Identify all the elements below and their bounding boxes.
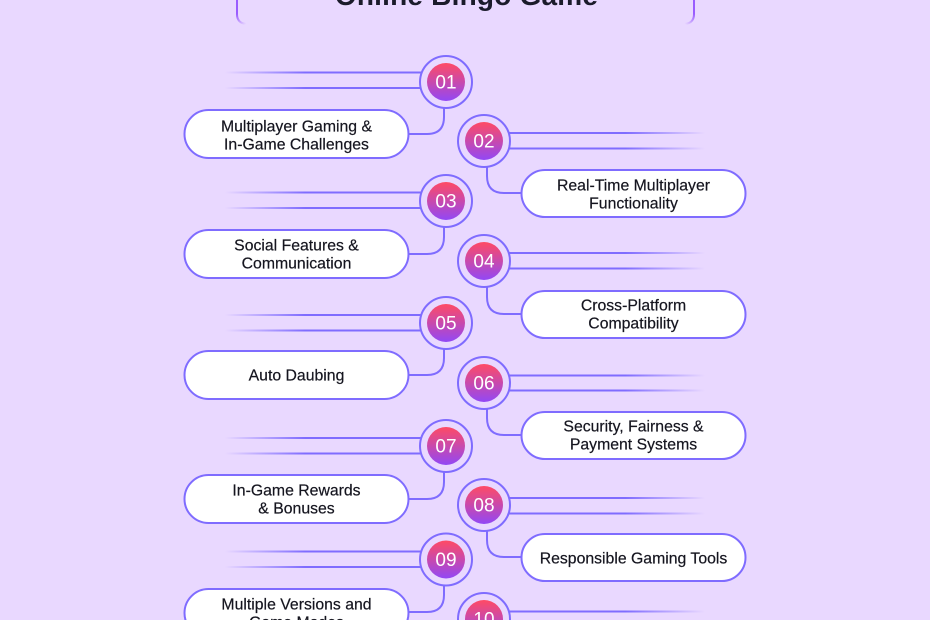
item 03: Social Features & xyxy=(234,238,359,254)
item 04: 04 xyxy=(473,252,495,272)
item 02: Functionality xyxy=(589,196,678,212)
item 07: In-Game Rewards xyxy=(232,482,361,500)
item 04: Compatibility xyxy=(588,316,679,332)
item 08: Responsible Gaming Tools xyxy=(540,550,727,568)
item 03: 03 xyxy=(435,192,457,212)
item 09: Multiple Versions and xyxy=(221,596,372,614)
item 08 xyxy=(458,479,746,581)
item 01 xyxy=(184,56,472,158)
item 01: Multiplayer Gaming & xyxy=(221,118,372,136)
item 03 xyxy=(184,175,472,278)
item 05: 05 xyxy=(435,314,457,334)
item 03: Communication xyxy=(242,256,351,272)
item 08: 08 xyxy=(473,496,495,516)
item 01: 01 xyxy=(435,72,457,94)
item 09: 09 xyxy=(435,550,457,571)
item 01: In-Game Challenges xyxy=(224,136,369,154)
item 10 xyxy=(458,593,705,620)
item 04 xyxy=(458,235,746,338)
item 05 xyxy=(184,297,472,399)
item 05: Auto Daubing xyxy=(249,368,344,384)
item 09 xyxy=(184,534,472,620)
item 07: & Bonuses xyxy=(258,500,335,518)
item 02: Real-Time Multiplayer xyxy=(557,178,710,194)
item 07 xyxy=(184,420,472,523)
item 02: 02 xyxy=(473,132,495,152)
item 07: 07 xyxy=(435,436,457,458)
item 06: Payment Systems xyxy=(570,436,697,454)
title frame xyxy=(237,0,694,24)
item 06: Security, Fairness & xyxy=(563,418,704,436)
item 04: Cross-Platform xyxy=(581,298,686,314)
item 06 xyxy=(458,357,746,459)
item 02 xyxy=(458,115,746,217)
item 06: 06 xyxy=(473,374,495,394)
